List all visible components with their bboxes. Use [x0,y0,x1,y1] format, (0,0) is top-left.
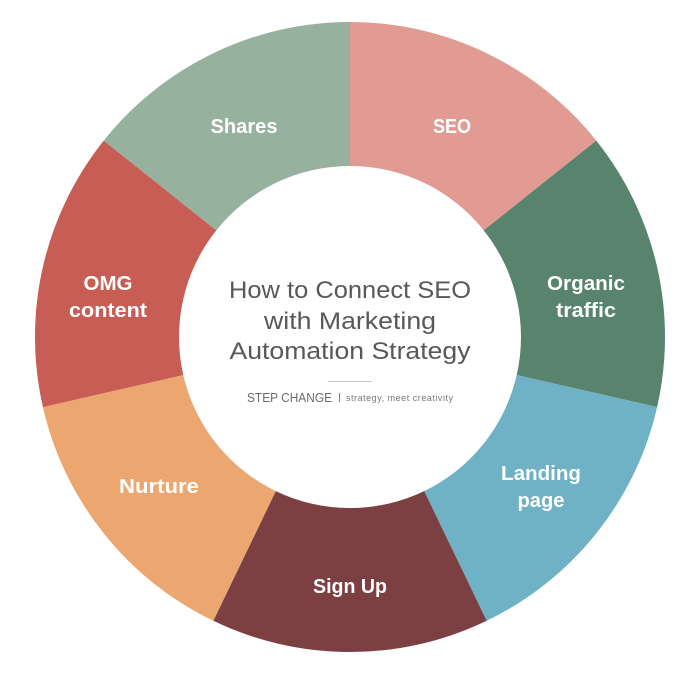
divider line [328,381,372,382]
label: Shares: Shares [210,116,278,138]
segment: OMG content [35,141,216,407]
label: OMG content: content [69,300,147,322]
segment: Organic traffic [484,141,665,407]
label: OMG content: OMG [84,273,132,295]
segment: Landing page [424,375,657,621]
label: Sign Up: Sign Up [313,576,387,598]
label: Landing page: page [518,490,564,512]
segment: Nurture [43,375,276,621]
logo tagline: strategy, meet creativity [346,393,454,403]
title: How to Connect SEO [229,277,471,304]
label: Organic traffic: Organic [547,273,625,295]
label: Landing page: Landing [501,463,581,485]
title: Automation Strategy [230,338,471,365]
label: SEO: SEO [433,116,471,138]
logo: Step Change wordmark and tagline [247,391,454,405]
segment: SEO [350,22,596,230]
segment: Sign Up [213,491,487,652]
logo separator [339,393,340,402]
title: with Marketing [263,308,436,335]
logo wordmark: STEP CHANGE [247,391,332,405]
label: Nurture: Nurture [119,476,199,498]
label: Organic traffic: traffic [556,300,616,322]
segment: Shares [104,22,350,230]
